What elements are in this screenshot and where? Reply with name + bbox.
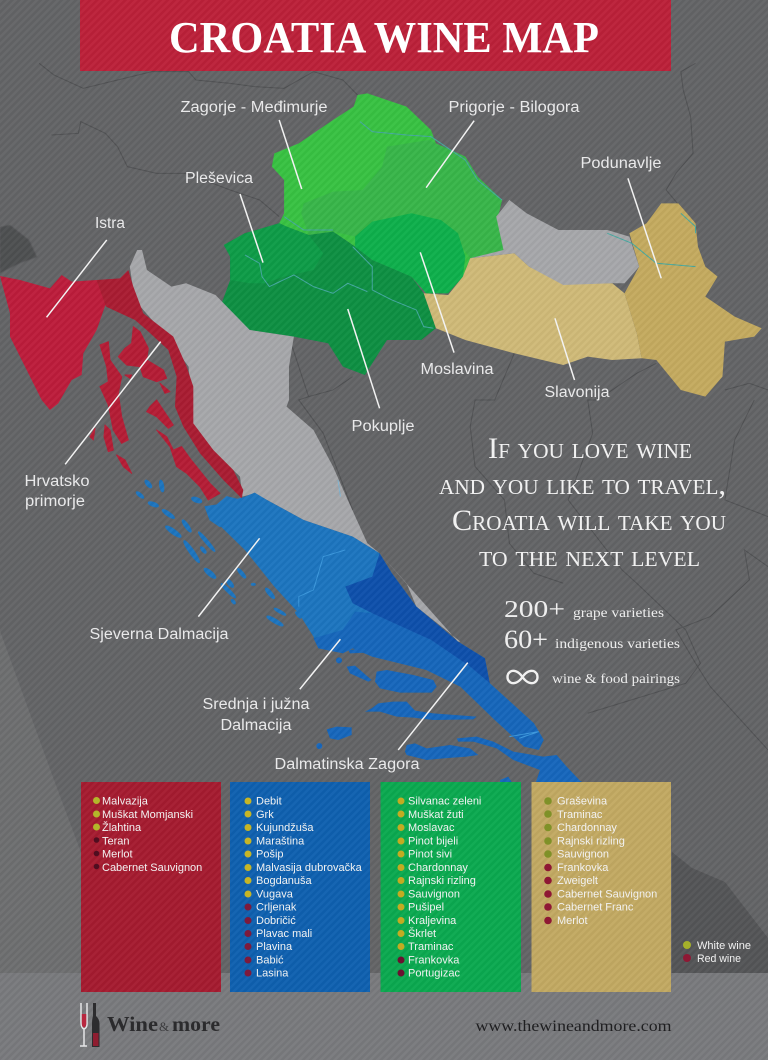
panel: Continental green varieties: Škrlet — [408, 927, 436, 940]
panel: Istra and Primorje varieties: Teran — [102, 836, 130, 848]
panel: Continental green varieties: Sauvignon — [408, 888, 460, 900]
region: Pleševica — [224, 223, 323, 283]
panel: Continental green varieties: Pinot sivi — [408, 848, 452, 860]
legend — [683, 940, 751, 965]
region: Sjeverna Dalmacija mainland — [211, 493, 544, 750]
panel: Slavonia varieties: Cabernet Sauvignon — [557, 888, 657, 900]
region: Pokuplje — [220, 223, 436, 375]
panel: Continental green varieties: Kraljevina — [408, 915, 457, 927]
region: Srednja i južna Dalmacija mainland — [313, 612, 544, 750]
panel: Slavonia varieties: Zweigelt — [557, 875, 598, 887]
panel: Dalmatia varieties: Kujundžuša — [256, 822, 314, 834]
tagline: Croatia will take you — [452, 504, 726, 537]
panel: Dalmatia varieties: Bogdanuša — [256, 875, 313, 887]
southern Dalmatia islands — [316, 648, 593, 790]
logo: Wine & more: Wine — [107, 1012, 158, 1036]
panel: Slavonia varieties: Frankovka — [557, 862, 609, 874]
panel: Dalmatia varieties: Pošip — [256, 848, 284, 860]
region labels: Slavonija — [544, 384, 610, 401]
region labels: Istra — [95, 215, 125, 232]
panel: Slavonia varieties: Rajnski rizling — [557, 836, 625, 848]
region labels: Moslavina — [420, 361, 494, 378]
panel: Continental green varieties: Frankovka — [408, 954, 460, 966]
region labels: Srednja i južna — [202, 696, 310, 713]
website url: www.thewineandmore.com — [476, 1018, 672, 1035]
panel: Continental green varieties: Rajnski rizling — [408, 875, 476, 887]
legend: Red wine — [697, 953, 741, 965]
region labels: primorje — [25, 493, 85, 510]
region labels: Hrvatsko — [24, 473, 90, 490]
panel: Slavonia varieties: Merlot — [557, 915, 588, 927]
panel: Continental green varieties: Chardonnay — [408, 862, 468, 874]
stats — [504, 597, 680, 687]
tagline: and you like to travel, — [439, 468, 726, 501]
region: grey Lika — [130, 250, 460, 642]
Hrvatsko primorje islands — [90, 327, 220, 500]
stats: grape varieties — [573, 606, 664, 621]
panel: Dalmatia varieties: Grk — [256, 809, 274, 821]
rivers in the north — [245, 122, 696, 328]
region labels: Podunavlje — [580, 155, 662, 172]
panel: Istra and Primorje varieties: Muškat Momjanski — [102, 809, 193, 821]
panel: Dalmatia varieties: Debit — [256, 796, 282, 808]
region: Zagorje - Međimurje — [272, 93, 504, 293]
logo: Wine & more — [80, 1003, 220, 1047]
title banner — [80, 0, 671, 71]
neighbouring country borders — [39, 63, 768, 750]
region: Prigorje - Bilogora — [301, 140, 504, 258]
panel: Dalmatia varieties — [230, 782, 370, 992]
region: Podunavlje — [624, 203, 762, 397]
region: grey central Slavonia — [470, 200, 639, 285]
panel: Continental green varieties: Pušipel — [408, 902, 444, 914]
region labels: Pokuplje — [352, 418, 414, 435]
panel: Dalmatia varieties: Dobričić — [256, 915, 296, 927]
panel: Slavonia varieties — [532, 782, 671, 992]
panel: Istra and Primorje varieties: Malvazija — [102, 796, 149, 808]
panel: Dalmatia varieties: Malvasija dubrovačka — [256, 862, 363, 874]
stats: wine & food pairings — [552, 672, 680, 687]
region labels: Sjeverna Dalmacija — [90, 626, 229, 643]
stats: 60+ — [504, 625, 548, 654]
rivers in Dalmatia — [299, 550, 539, 738]
region: Hrvatsko primorje coast — [97, 270, 243, 498]
region labels: Prigorje - Bilogora — [448, 99, 580, 116]
region: Istra — [0, 270, 243, 500]
panel: Continental green varieties — [380, 782, 521, 992]
panel: Slavonia varieties: Chardonnay — [557, 822, 617, 834]
panel: Slavonia varieties: Traminac — [557, 809, 603, 821]
panel: Dalmatia varieties: Maraština — [256, 836, 305, 848]
legend: White wine — [697, 940, 751, 952]
panel: Continental green varieties: Portugizac — [408, 968, 460, 980]
panel: Dalmatia varieties: Plavina — [256, 941, 293, 953]
panel: Istra and Primorje varieties: Merlot — [102, 848, 133, 860]
panel: Istra and Primorje varieties: Cabernet Sauvignon — [102, 862, 202, 874]
northern Dalmatia islands — [135, 479, 302, 627]
title: CROATIA WINE MAP — [169, 13, 599, 62]
region: Dalmatinska Zagora — [345, 553, 490, 683]
region labels — [24, 99, 662, 773]
panel: Dalmatia varieties: Lasina — [256, 968, 289, 980]
region labels: Dalmacija — [220, 717, 292, 734]
stats: indigenous varieties — [555, 637, 680, 652]
tagline: If you love wine — [488, 432, 692, 465]
logo: Wine & more: & — [159, 1019, 169, 1034]
region labels: Pleševica — [185, 170, 253, 187]
map of Croatia wine regions — [130, 93, 762, 750]
panel: Slavonia varieties: Graševina — [557, 796, 608, 808]
stats: 200+ — [504, 597, 565, 623]
region labels: Dalmatinska Zagora — [274, 756, 420, 773]
logo: Wine & more: more — [172, 1012, 220, 1036]
panel: Dalmatia varieties: Crljenak — [256, 902, 297, 914]
panel: Istra and Primorje varieties: Žlahtina — [102, 821, 142, 834]
panel: Dalmatia varieties: Vugava — [256, 888, 294, 900]
river on the Lika edge — [338, 480, 340, 497]
tagline: to the next level — [479, 540, 700, 573]
panel: Slavonia varieties: Sauvignon — [557, 848, 609, 860]
region labels: Zagorje - Međimurje — [180, 99, 328, 116]
panel: Continental green varieties: Pinot bijeli — [408, 836, 458, 848]
region: Moslavina — [355, 213, 465, 293]
icon: infinity — [508, 671, 538, 683]
panel: Slavonia varieties: Cabernet Franc — [557, 902, 634, 914]
tagline — [439, 432, 726, 573]
panel: Continental green varieties: Silvanac zeleni — [408, 796, 481, 808]
panel: Dalmatia varieties: Plavac mali — [256, 928, 312, 940]
panel: Continental green varieties: Traminac — [408, 941, 454, 953]
leader lines — [47, 120, 661, 750]
panel: Continental green varieties: Muškat žuti — [408, 809, 464, 821]
region: Slavonija — [424, 253, 642, 365]
panel: Istra and Primorje varieties — [81, 782, 221, 992]
panel: Dalmatia varieties: Babić — [256, 954, 284, 966]
icon: glass and bottle — [80, 1003, 100, 1047]
panel: Continental green varieties: Moslavac — [408, 822, 455, 834]
